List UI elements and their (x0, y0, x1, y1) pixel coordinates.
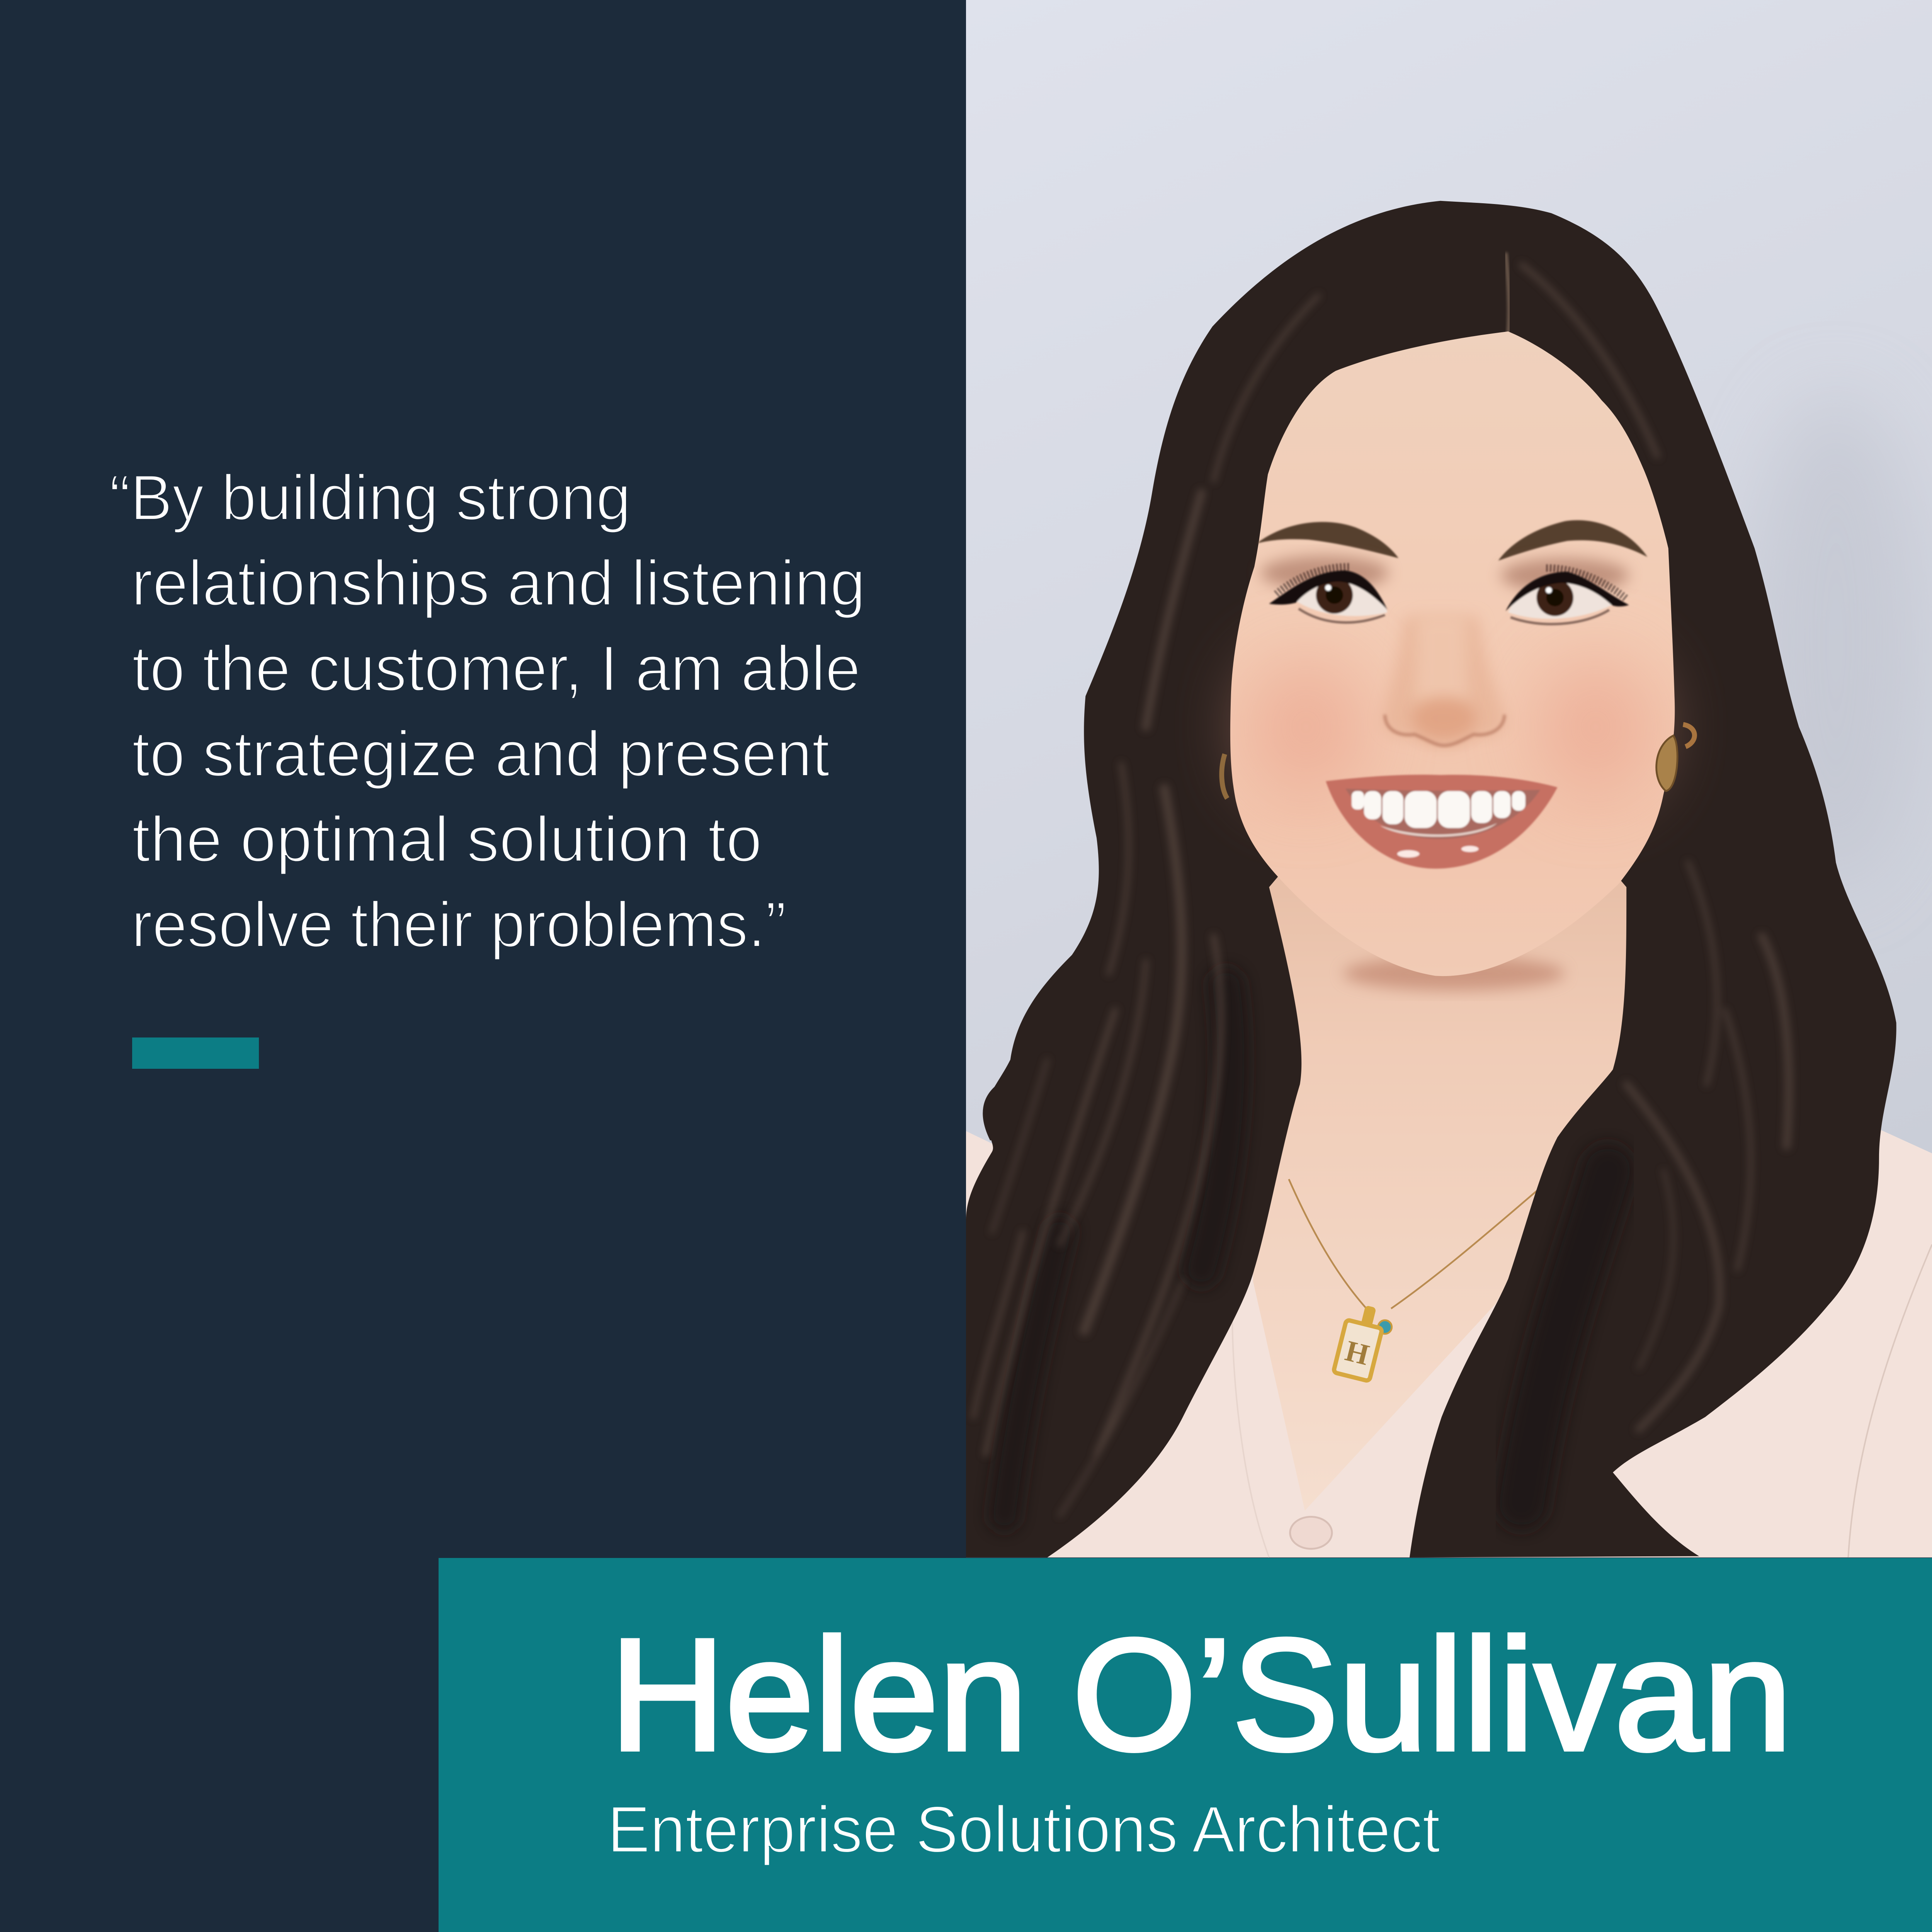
blouse (966, 1115, 1932, 1558)
panel: navy quote background (0, 0, 966, 1932)
accent bar (132, 1037, 259, 1069)
portrait photo illustration (966, 0, 1932, 1558)
right eye (1506, 568, 1629, 624)
left earring (1222, 754, 1227, 798)
quote text: to the customer, I am able (132, 633, 861, 704)
quote text: “By building strong (109, 462, 631, 534)
quote text: resolve their problems.” (131, 889, 786, 961)
hair: right side (1294, 201, 1896, 1558)
hair: left side (966, 201, 1602, 1558)
eye shadow (1260, 556, 1629, 593)
face (1222, 332, 1694, 976)
photo backdrop (966, 0, 1932, 1558)
nose shading (1383, 616, 1506, 748)
right earring (1656, 724, 1694, 791)
quote text: to strategize and present (132, 718, 830, 790)
blouse button (1290, 1517, 1332, 1549)
panel: teal name banner (439, 1558, 1932, 1932)
mouth with lips and teeth (1326, 775, 1558, 869)
left eyebrow (1257, 522, 1398, 558)
quote text: relationships and listening (131, 548, 866, 619)
cheek blush (1251, 659, 1651, 795)
quote text: the optimal solution to (132, 804, 762, 875)
neck and chest skin (1253, 850, 1633, 1510)
necklace with pendant: H (1342, 1334, 1372, 1372)
left eye (1269, 567, 1388, 622)
necklace with pendant (1289, 1168, 1564, 1381)
job title: Enterprise Solutions Architect (607, 1793, 1440, 1866)
hair parting (1506, 253, 1509, 335)
left curl wisps (985, 1084, 1010, 1146)
chin shadow (1343, 956, 1565, 991)
name heading: Helen O’Sullivan (610, 1606, 1792, 1784)
right eyebrow (1498, 520, 1647, 561)
quote text (109, 462, 866, 961)
